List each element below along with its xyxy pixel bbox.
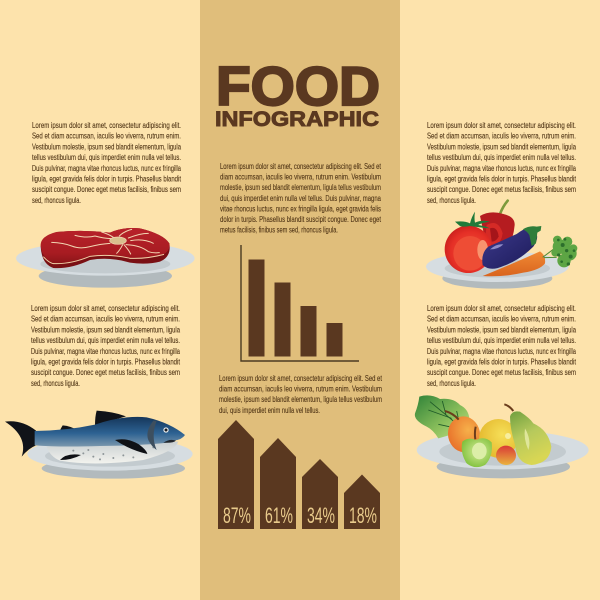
text block: center upper [220,161,381,235]
text block: middle left: tellus vestibulum dui, quis imperdiet enim nulla vel tellus. [31,335,180,345]
text block: middle left: Duis pulvinar, magna vitae rhoncus luctus, nunc ex fringilla [31,346,180,356]
text block: center upper: Lorem ipsum dolor sit amet, consectetur adipiscing elit. Sed et [220,161,381,171]
illustration: steak on plate [16,228,195,288]
title: INFOGRAPHIC [215,108,379,131]
text block: center upper: diam accumsan, iaculis leo viverra, rutrum enim. Vestibulum [220,172,381,182]
text block: top left: Vestibulum molestie, ipsum sed blandit elementum, ligula [32,141,181,151]
text block: center upper: dolor in turpis. Phasellus blandit suscipit congue. Donec eget [220,214,381,224]
center panel [200,0,400,600]
text block: middle left: Lorem ipsum dolor sit amet, consectetur adipiscing elit. [31,303,180,313]
text block: middle left: suscipit congue. Donec eget metus facilisis, finibus sem [31,367,180,377]
arrow bars with percentages [218,420,380,529]
text block: top left: Duis pulvinar, magna vitae rhoncus luctus, nunc ex fringilla [32,163,181,173]
illustration: fruit on plate [415,395,589,478]
text block: center lower: dui, quis imperdiet enim nulla vel tellus. [219,405,320,415]
text block: center lower [219,373,382,415]
text block: top left: sed, rhoncus ligula. [32,195,81,205]
text block: middle right: sed, rhoncus ligula. [427,378,476,388]
arrow bars with percentages: 34% [307,503,335,528]
text block: middle left [31,303,180,388]
text block: center lower: diam accumsan, iaculis leo viverra, rutrum enim. Vestibulum [219,384,382,394]
text block: middle left: ligula, eget gravida felis dolor in turpis. Phasellus blandit [31,356,180,366]
text block: middle left: sed, rhoncus ligula. [31,378,80,388]
arrow bars with percentages: 18% [349,503,377,528]
text block: center upper: molestie, ipsum sed blandit elementum, ligula tellus vestibulum [220,182,381,192]
text block: middle left: Vestibulum molestie, ipsum sed blandit elementum, ligula [31,324,180,334]
text block: center lower: Lorem ipsum dolor sit amet, consectetur adipiscing elit. Sed et [219,373,382,383]
arrow bars with percentages: 61% [265,503,293,528]
text block: top left [32,120,181,205]
illustration: vegetables on plate [426,201,577,289]
text block: top right [427,120,576,205]
arrow bars with percentages: 87% [223,503,251,528]
text block: top left: suscipit congue. Donec eget metus facilisis, finibus sem [32,184,181,194]
text block: top left: tellus vestibulum dui, quis imperdiet enim nulla vel tellus. [32,152,181,162]
text block: top left: Sed et diam accumsan, iaculis leo viverra, rutrum enim. [32,131,181,141]
text block: middle left: Sed et diam accumsan, iaculis leo viverra, rutrum enim. [31,314,180,324]
text block: top left: ligula, eget gravida felis dolor in turpis. Phasellus blandit [32,174,181,184]
bar chart [241,245,359,361]
text block: top right: sed, rhoncus ligula. [427,195,476,205]
illustration: fish on plate [5,411,193,479]
text block: top left: Lorem ipsum dolor sit amet, consectetur adipiscing elit. [32,120,181,130]
text block: middle right [427,303,576,388]
text block: center lower: molestie, ipsum sed blandit elementum, ligula tellus vestibulum [219,394,382,404]
text block: center upper: vitae rhoncus luctus, nunc ex fringilla ligula, eget gravida felis [220,203,381,213]
title: FOOD [216,55,380,117]
text block: center upper: metus facilisis, finibus sem sed, rhoncus ligula. [220,225,338,235]
text block: center upper: dui, quis imperdiet enim nulla vel tellus. Duis pulvinar, magna [220,193,381,203]
